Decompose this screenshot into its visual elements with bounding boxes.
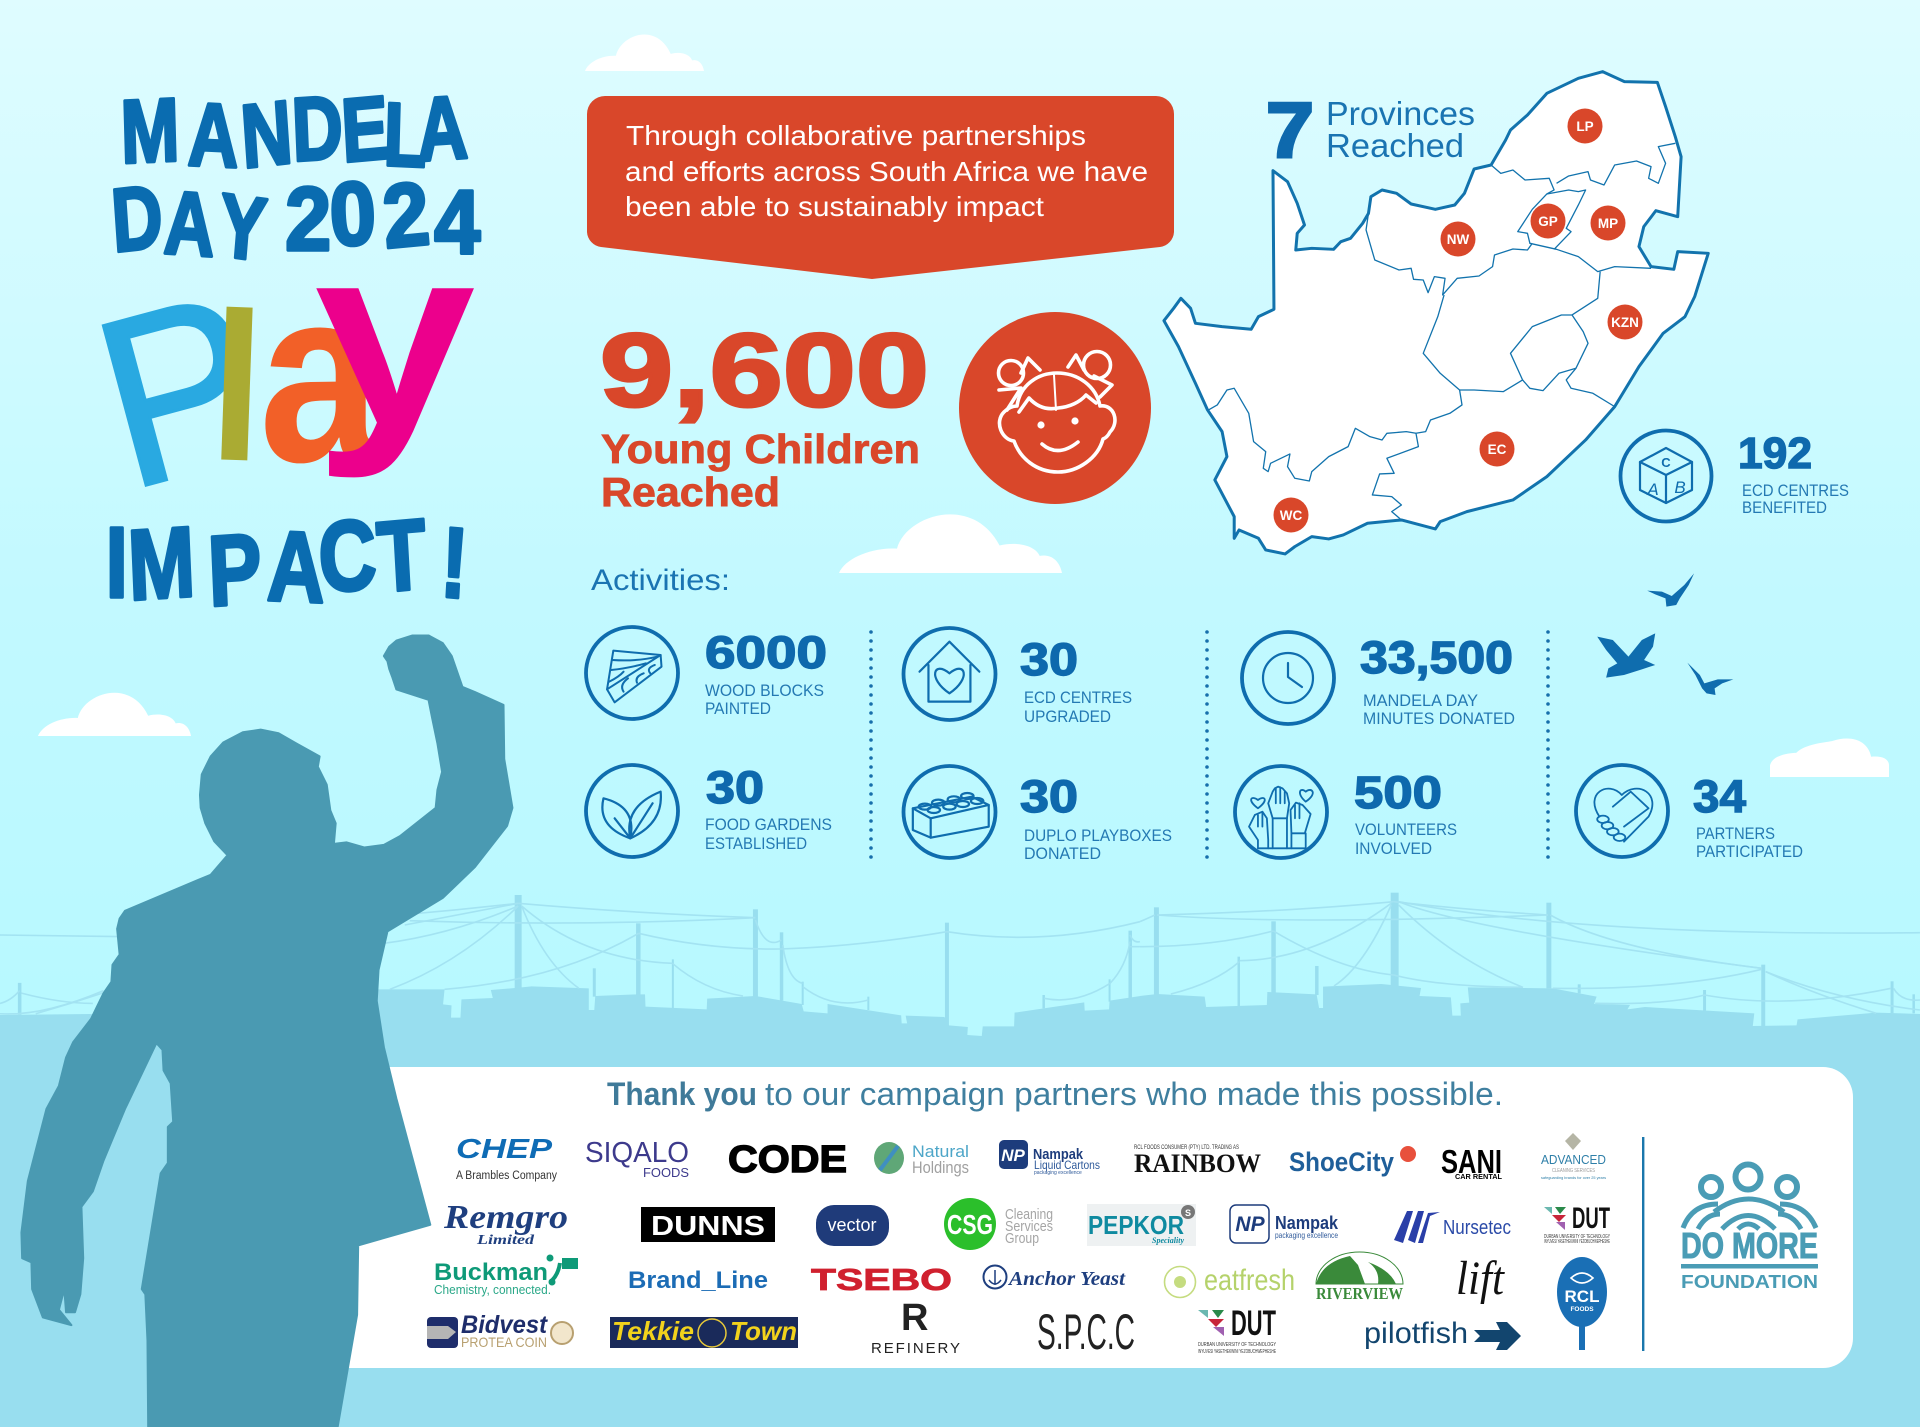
logo: Vector: vector <box>827 1215 877 1235</box>
partners panel background <box>300 1067 1853 1368</box>
township skyline <box>0 893 1920 1427</box>
logo: Brand Line: Brand_Line <box>628 1267 768 1294</box>
logo: lift: lift <box>1456 1252 1505 1305</box>
logo: Pepkor Speciality: PEPKOR <box>1088 1210 1184 1240</box>
logo: Buckman <box>434 1254 578 1297</box>
logo: Nursetec: Nursetec <box>1443 1217 1511 1239</box>
activity: volunteers: VOLUNTEERS <box>1355 820 1457 839</box>
logo: Vector <box>816 1205 889 1246</box>
activity: ECD centres upgraded: ECD CENTRES <box>1024 688 1132 707</box>
icon: clock <box>1242 632 1334 724</box>
stat: young children reached <box>600 313 929 515</box>
icon: ABC block: A <box>1646 480 1659 499</box>
cloud: centre <box>839 514 1062 573</box>
logo: Natural Holdings: Natural <box>912 1142 969 1161</box>
icon: raised hands <box>1235 766 1327 858</box>
stat: young children reached: 9,600 <box>600 313 929 429</box>
badge: MP <box>1590 206 1626 240</box>
activity: partners: 34 <box>1693 771 1746 822</box>
logo: CHEP <box>456 1133 557 1182</box>
activity: wood blocks: PAINTED <box>705 699 771 718</box>
logo: Do More Foundation <box>1681 1164 1818 1292</box>
activity: volunteers: 500 <box>1354 767 1442 818</box>
icon: duplo brick <box>904 766 996 858</box>
logo: Siqalo Foods: FOODS <box>643 1165 689 1180</box>
icon: handshake heart <box>1576 765 1668 857</box>
logo: Refinery: R <box>901 1297 928 1339</box>
badge: GP: GP <box>1538 214 1558 229</box>
logo: Nampak Liquid Cartons: NP <box>1001 1146 1025 1165</box>
logo: CHEP: A Brambles Company <box>456 1170 557 1182</box>
logo: Nampak Liquid Cartons: Liquid Cartons <box>1034 1158 1100 1172</box>
logo: Pepkor Speciality: Speciality <box>1152 1236 1184 1245</box>
activity: wood blocks: 6000 <box>705 627 827 678</box>
logo: RCL Foods <box>1557 1257 1607 1350</box>
logo: Nampak Liquid Cartons: Nampak <box>1033 1146 1084 1163</box>
activity: ECD centres upgraded: 30 <box>1020 634 1078 685</box>
badge: GP <box>1530 204 1566 238</box>
badge: NW: NW <box>1447 232 1469 247</box>
logo: Dunns <box>641 1207 775 1242</box>
stat: young children reached: Reached <box>601 469 780 515</box>
activity: minutes donated: MINUTES DONATED <box>1363 709 1515 728</box>
title: y <box>314 193 477 480</box>
badge: KZN: KZN <box>1611 315 1639 330</box>
icon: birds <box>1597 573 1733 695</box>
logo: Riverview: RIVERVIEW <box>1316 1284 1403 1303</box>
activity: partners: PARTICIPATED <box>1696 842 1803 861</box>
logo: CSG Cleaning Services Group: CSG <box>947 1209 993 1240</box>
logo: CSG Cleaning Services Group: Cleaning <box>1005 1206 1053 1223</box>
logo: CSG Cleaning Services Group <box>944 1198 1053 1250</box>
title: a <box>259 237 382 514</box>
logo: Nursetec <box>1394 1211 1511 1243</box>
logo: Rainbow: RAINBOW <box>1134 1149 1261 1178</box>
title: P <box>72 241 288 540</box>
activity: volunteers: INVOLVED <box>1355 839 1432 858</box>
stat: young children reached: Young Children <box>601 426 920 472</box>
title: DAY <box>108 166 270 281</box>
title: MANDELA <box>119 77 470 188</box>
icon: leaves <box>586 765 678 857</box>
heading: 7 provinces reached: Reached <box>1326 127 1464 164</box>
logo: Do More Foundation: FOUNDATION <box>1681 1272 1818 1292</box>
heading: 7 provinces reached: Provinces <box>1326 95 1475 132</box>
icon: child face <box>959 312 1151 504</box>
activity: wood blocks <box>586 627 827 719</box>
logo: Advanced Cleaning Services: ADVANCED <box>1541 1152 1606 1167</box>
heading: thank you to partners: Thank you <box>607 1076 757 1112</box>
logo: Tekkie Town <box>610 1316 798 1348</box>
icon: house with heart <box>904 628 996 720</box>
activity: volunteers <box>1235 766 1457 858</box>
title: 2024 <box>285 163 480 273</box>
badge: EC <box>1480 432 1514 466</box>
logo: Bidvest Protea Coin: Bidvest <box>461 1311 549 1339</box>
logo: Riverview <box>1316 1252 1403 1303</box>
logo: pilotfish <box>1364 1317 1521 1350</box>
activity: partners <box>1576 765 1803 861</box>
heading: 7 provinces reached <box>1266 86 1475 174</box>
logo: Nampak: Nampak <box>1275 1213 1339 1233</box>
icon: ABC block: B <box>1674 478 1686 497</box>
activity: duplo playboxes: DONATED <box>1024 844 1101 863</box>
logo: DUT: DURBAN UNIVERSITY OF TECHNOLOGY <box>1544 1234 1610 1240</box>
logo: Buckman: Chemistry, connected. <box>434 1282 551 1297</box>
badge: NW <box>1440 222 1476 256</box>
logo: RCL Foods: RCL <box>1565 1287 1599 1306</box>
logo: Anchor Yeast: Anchor Yeast <box>1007 1268 1127 1290</box>
badge: LP <box>1568 108 1602 144</box>
logo: CSG Cleaning Services Group: Services <box>1005 1218 1053 1235</box>
activity: partners: PARTNERS <box>1696 824 1775 843</box>
badge: WC: WC <box>1280 508 1302 523</box>
activity: food gardens <box>586 762 832 857</box>
logo: Bidvest Protea Coin: PROTEA COIN <box>461 1334 547 1350</box>
logo: DUT second <box>1198 1304 1276 1355</box>
stat: 192 ECD centres <box>1620 429 1849 522</box>
cloud: right <box>1770 739 1889 777</box>
cloud: top <box>585 35 704 71</box>
logo: SPCC: S.P.C.C <box>1037 1304 1135 1360</box>
logo: pilotfish: pilotfish <box>1364 1317 1468 1350</box>
activity: minutes donated <box>1242 632 1515 728</box>
logo: Anchor Yeast <box>984 1266 1127 1290</box>
logo: Buckman: Buckman <box>434 1259 548 1286</box>
logo: Tsebo: TSEBO <box>811 1262 952 1297</box>
activity: duplo playboxes <box>904 766 1172 863</box>
divider <box>1642 1137 1644 1351</box>
logo: Bidvest Protea Coin <box>427 1311 573 1350</box>
logo: Pepkor Speciality <box>1087 1204 1196 1246</box>
activity: ECD centres upgraded: UPGRADED <box>1024 707 1111 726</box>
logo: Siqalo Foods: SIQALO <box>585 1137 689 1169</box>
title <box>72 77 480 628</box>
logo: Sani Car Rental: SANI <box>1441 1143 1502 1180</box>
logo: Sani Car Rental: CAR RENTAL <box>1455 1172 1502 1181</box>
logo: Dunns: DUNNS <box>651 1210 765 1241</box>
stat: 192 ECD centres: ECD CENTRES <box>1742 481 1849 500</box>
logo: DUT second: DUT <box>1231 1304 1276 1343</box>
logo: Advanced Cleaning Services: CLEANING SERVICES <box>1552 1168 1596 1174</box>
logo: eatfresh <box>1164 1264 1295 1298</box>
logo: eatfresh: eatfresh <box>1204 1264 1295 1297</box>
logo: Tekkie Town: Tekkie <box>612 1316 694 1346</box>
badge: EC: EC <box>1488 442 1507 457</box>
map: South Africa provinces <box>1164 72 1708 554</box>
activity: food gardens: FOOD GARDENS <box>705 815 832 834</box>
logo: DUT second: DURBAN UNIVERSITY OF TECHNOLOGY <box>1198 1342 1276 1348</box>
logo: Pepkor Speciality: S <box>1185 1208 1191 1218</box>
title: IMPACT! <box>106 499 471 628</box>
partner logos <box>427 1133 1610 1360</box>
heading: activities: Activities: <box>591 564 730 597</box>
callout: partnerships: been able to sustainably impact <box>625 191 1044 222</box>
icon: ABC block <box>1620 430 1712 522</box>
activity: food gardens: ESTABLISHED <box>705 834 807 853</box>
logo: Remgro <box>443 1199 568 1248</box>
activity: ECD centres upgraded <box>904 628 1132 726</box>
silhouette of Nelson Mandela with raised fist <box>21 635 512 1427</box>
logo: RCL Foods: FOODS <box>1570 1306 1594 1313</box>
logo: Nampak Liquid Cartons <box>999 1140 1100 1176</box>
stat: 192 ECD centres: 192 <box>1738 429 1812 478</box>
logo: DUT: DUT <box>1572 1202 1610 1235</box>
logo: Code: CODE <box>728 1139 847 1181</box>
logo: Natural Holdings: Holdings <box>912 1158 969 1177</box>
activity: wood blocks: WOOD BLOCKS <box>705 681 824 700</box>
callout: partnerships: and efforts across South Africa we have <box>625 156 1148 187</box>
logo: CHEP: CHEP <box>456 1133 552 1164</box>
logo: Rainbow: RCL FOODS CONSUMER (PTY) LTD. TRADING AS <box>1134 1145 1239 1151</box>
badge: WC <box>1274 498 1308 532</box>
logo: Refinery: REFINERY <box>871 1340 960 1357</box>
callout: partnerships <box>587 96 1174 279</box>
logo: Advanced Cleaning Services <box>1541 1133 1606 1180</box>
stat: 192 ECD centres: BENEFITED <box>1742 498 1827 517</box>
activity: minutes donated: 33,500 <box>1360 632 1513 683</box>
callout: partnerships: Through collaborative partnerships <box>626 120 1086 151</box>
logo: Nampak <box>1230 1205 1339 1243</box>
logo: Natural Holdings <box>874 1142 969 1177</box>
cloud: left <box>38 693 191 736</box>
logo: Nampak: NP <box>1235 1213 1266 1236</box>
heading: thank you to partners: to our campaign partners who made this possible. <box>765 1076 1503 1112</box>
logo: Refinery <box>871 1297 960 1357</box>
logo: Tekkie Town: Town <box>730 1316 797 1346</box>
logo: DUT: INYUVESI YASETHEKWINI YEZOBUCHWEPHESHE <box>1544 1239 1610 1245</box>
title: l <box>206 268 267 506</box>
logo: Advanced Cleaning Services: safeguarding brands for over 25 years <box>1541 1175 1606 1180</box>
logo: Remgro: Remgro <box>443 1199 568 1236</box>
logo: Do More Foundation: DO MORE <box>1681 1225 1818 1266</box>
badge: LP: LP <box>1576 119 1594 134</box>
logo: CSG Cleaning Services Group: Group <box>1005 1230 1039 1247</box>
badge: KZN <box>1608 304 1642 340</box>
activity: food gardens: 30 <box>706 762 764 813</box>
logo: Nampak Liquid Cartons: packaging excellence <box>1034 1170 1082 1176</box>
logo: Remgro: Limited <box>476 1233 535 1248</box>
logo: DUT <box>1544 1202 1610 1245</box>
logo: ShoeCity: ShoeCity <box>1289 1147 1394 1177</box>
icon: wood block <box>586 627 678 719</box>
logo: Nampak: packaging excellence <box>1275 1230 1338 1240</box>
activity: duplo playboxes: 30 <box>1020 771 1078 822</box>
activity: duplo playboxes: DUPLO PLAYBOXES <box>1024 826 1172 845</box>
activity: minutes donated: MANDELA DAY <box>1363 691 1478 710</box>
heading: 7 provinces reached: 7 <box>1266 86 1314 174</box>
logo: DUT second: INYUVESI YASETHEKWINI YEZOBUCHWEPHESHE <box>1198 1349 1276 1355</box>
badge: MP: MP <box>1598 216 1618 231</box>
icon: ABC block: C <box>1661 455 1671 470</box>
